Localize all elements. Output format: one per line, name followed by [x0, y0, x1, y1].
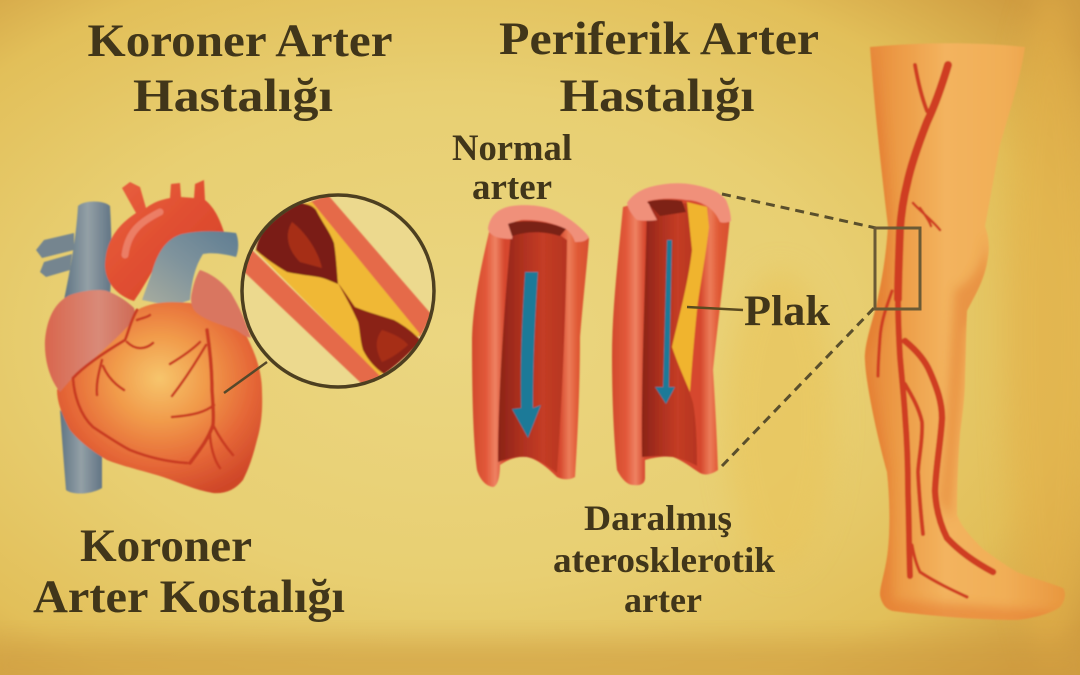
label: Daralmış aterosklerotik arter: aterosklerotik — [553, 540, 775, 580]
zoom box on leg — [875, 228, 920, 309]
title: Koroner Arter Hastalığı: Koroner Arter — [88, 15, 392, 67]
plaque — [255, 202, 420, 376]
label: Plak with leader — [687, 288, 830, 335]
illustration: leg — [860, 43, 1065, 625]
right atrium — [191, 270, 251, 338]
magnifier leader line — [224, 362, 267, 393]
caption: Koroner Arter Kostalığı — [33, 520, 345, 623]
left vein branches — [36, 233, 74, 277]
title: Periferik Arter Hastalığı: Hastalığı — [560, 70, 754, 122]
caption: Koroner Arter Kostalığı: Arter Kostalığı — [33, 571, 345, 623]
upper dark lumen — [256, 203, 338, 284]
lumen — [642, 203, 697, 466]
left atrium — [45, 290, 135, 392]
title: Periferik Arter Hastalığı: Periferik Arter — [499, 13, 819, 65]
title: Koroner Arter Hastalığı: Hastalığı — [133, 70, 333, 122]
lumen — [498, 222, 567, 473]
arteries — [878, 65, 993, 597]
dark lumen opening — [508, 221, 566, 236]
illustration: normal artery — [472, 205, 589, 487]
blue flow arrow — [655, 240, 675, 404]
label: Normal arter — [452, 128, 572, 208]
title: Periferik Arter Hastalığı — [499, 13, 819, 122]
leg shading — [867, 92, 1050, 620]
caption: Koroner Arter Kostalığı: Koroner — [80, 520, 252, 572]
superior vena cava — [64, 202, 112, 300]
label: Normal arter: arter — [472, 167, 552, 208]
illustration: narrowed artery — [612, 183, 731, 485]
lower artery wall — [240, 248, 381, 384]
label: Daralmış aterosklerotik arter: arter — [624, 580, 702, 620]
aorta highlight — [125, 212, 160, 255]
red highlight in lumen — [288, 222, 408, 362]
coronary vessels — [73, 310, 233, 468]
top rim — [488, 205, 589, 242]
zoom dashed lines — [722, 194, 876, 466]
upper artery wall — [305, 195, 432, 337]
outer wall — [612, 190, 730, 485]
pulmonary artery — [142, 231, 238, 306]
outer wall — [472, 215, 589, 487]
top rim — [627, 183, 731, 223]
dark lumen opening — [647, 200, 686, 216]
magnified coronary artery — [240, 195, 434, 387]
label: Normal arter: Normal — [452, 128, 572, 169]
illustration: heart — [36, 180, 262, 494]
blue flow arrow — [512, 272, 541, 438]
plaque — [672, 202, 709, 392]
lower dark lumen — [338, 283, 421, 374]
leg shape — [865, 43, 1065, 620]
label: Daralmış aterosklerotik arter: Daralmış — [584, 498, 732, 538]
ventricles — [57, 302, 262, 493]
inferior vena cava — [60, 410, 102, 494]
label: Daralmış aterosklerotik arter — [553, 498, 775, 620]
title: Koroner Arter Hastalığı — [88, 15, 392, 122]
aortic arch — [105, 180, 224, 301]
label: Plak with leader: Plak — [744, 288, 830, 335]
